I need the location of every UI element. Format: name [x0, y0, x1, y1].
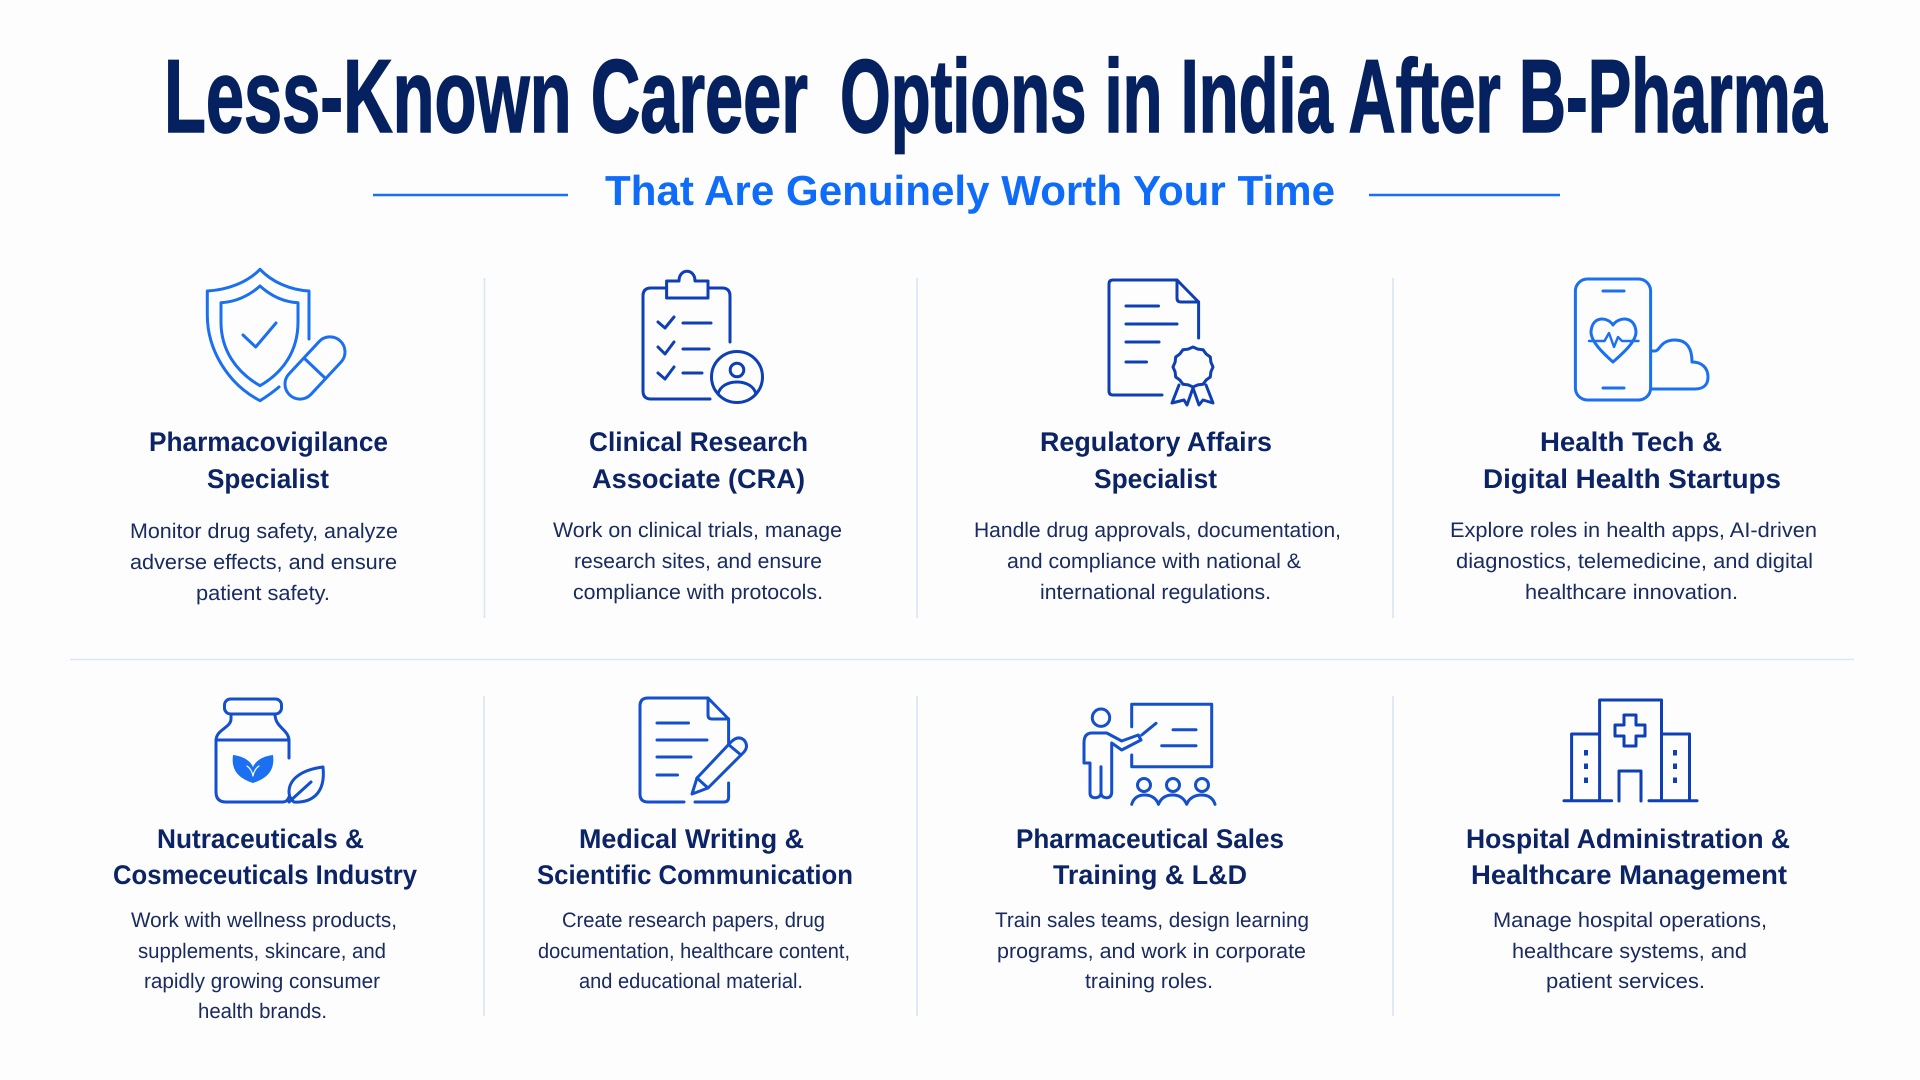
description: patient services.	[1546, 970, 1705, 993]
icon: document with seal	[1109, 280, 1213, 405]
heading: Nutraceuticals &	[157, 824, 364, 854]
icon: trainer at board with audience	[1084, 704, 1215, 804]
panel: Medical Writing & Scientific Communication	[537, 698, 853, 993]
panel: Pharmacovigilance Specialist	[130, 269, 398, 605]
description: Work with wellness products,	[131, 909, 397, 932]
heading: Healthcare Management	[1471, 860, 1787, 890]
panel: Clinical Research Associate	[553, 271, 842, 604]
heading: Associate (CRA)	[592, 464, 805, 494]
subtitle: That Are Genuinely Worth Your Time	[605, 167, 1335, 214]
heading: Specialist	[207, 464, 329, 494]
icon: shield and capsule	[207, 269, 351, 405]
icon: phone with heart and cloud	[1575, 279, 1708, 400]
heading: Pharmacovigilance	[149, 427, 388, 457]
description: compliance with protocols.	[573, 581, 823, 604]
panel: Regulatory Affairs Specialist	[974, 280, 1341, 604]
description: and compliance with national &	[1007, 550, 1301, 573]
description: adverse effects, and ensure	[130, 551, 397, 574]
heading: Hospital Administration &	[1466, 824, 1790, 854]
description: Train sales teams, design learning	[995, 909, 1309, 932]
panel: Nutraceuticals & Cosmeceuticals Industry	[113, 699, 417, 1023]
panel: Pharmaceutical Sales Training & L&D	[995, 704, 1309, 993]
description: Work on clinical trials, manage	[553, 519, 842, 542]
icon: hospital building	[1564, 700, 1697, 801]
description: research sites, and ensure	[574, 550, 822, 573]
description: training roles.	[1085, 970, 1213, 993]
description: and educational material.	[579, 970, 803, 993]
description: health brands.	[198, 1000, 327, 1023]
description: rapidly growing consumer	[144, 970, 380, 993]
description: Handle drug approvals, documentation,	[974, 519, 1341, 542]
heading: Cosmeceuticals Industry	[113, 860, 417, 890]
heading: Scientific Communication	[537, 860, 853, 890]
description: patient safety.	[196, 582, 330, 605]
heading: Regulatory Affairs	[1040, 427, 1272, 457]
description: Create research papers, drug	[562, 909, 825, 932]
description: healthcare systems, and	[1512, 940, 1747, 963]
description: healthcare innovation.	[1525, 581, 1738, 604]
heading: Health Tech &	[1540, 427, 1722, 457]
icon: bottle and leaf	[216, 699, 323, 802]
heading: Medical Writing &	[579, 824, 804, 854]
panel: Health Tech & Digital Health Startups	[1450, 279, 1817, 604]
description: documentation, healthcare content,	[538, 940, 850, 963]
description: diagnostics, telemedicine, and digital	[1456, 550, 1813, 573]
description: supplements, skincare, and	[138, 940, 386, 963]
heading: Specialist	[1094, 464, 1217, 494]
title: Less-Known Career	[164, 39, 808, 155]
icon: document with pen	[640, 698, 746, 802]
heading: Training & L&D	[1053, 860, 1247, 890]
description: Explore roles in health apps, AI-driven	[1450, 519, 1817, 542]
description: international regulations.	[1040, 581, 1271, 604]
heading: Digital Health Startups	[1483, 464, 1781, 494]
heading: Clinical Research	[589, 427, 808, 457]
icon: clipboard with person	[643, 271, 762, 402]
description: Manage hospital operations,	[1493, 909, 1767, 932]
heading: Pharmaceutical Sales	[1016, 824, 1284, 854]
description: programs, and work in corporate	[997, 940, 1306, 963]
panel: Hospital Administration & Healthcare Management	[1466, 700, 1790, 993]
description: Monitor drug safety, analyze	[130, 520, 398, 543]
